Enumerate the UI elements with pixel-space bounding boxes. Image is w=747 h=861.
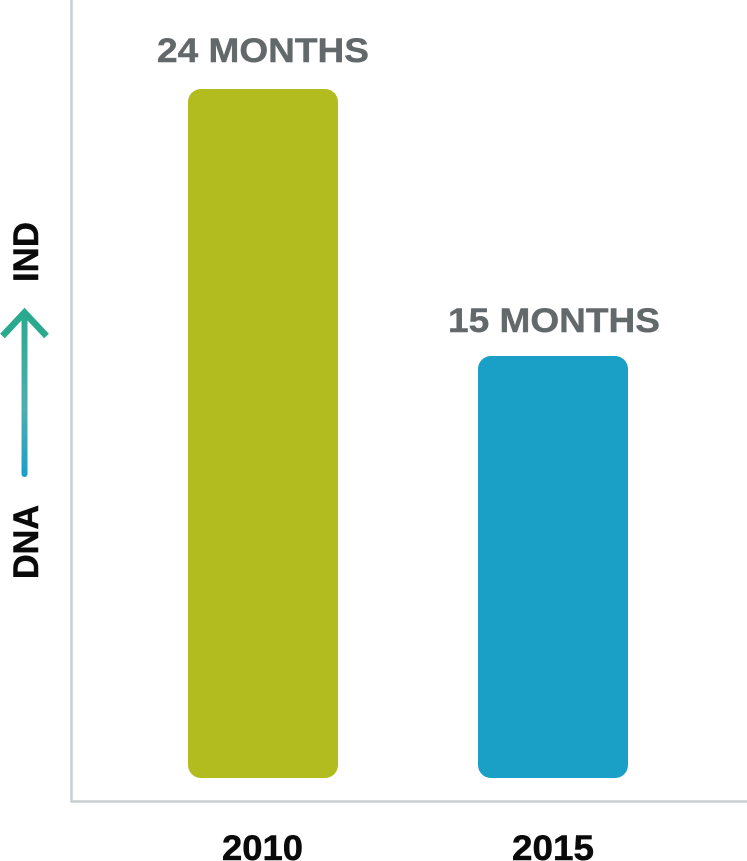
axis label: IND: IND <box>7 222 46 282</box>
value label: 24 months: 24 MONTHS <box>157 32 369 70</box>
arrow: DNA to IND <box>2 312 46 477</box>
axis label: DNA: DNA <box>7 505 46 579</box>
bar: 2010 <box>188 89 338 778</box>
value label: 15 months: 15 MONTHS <box>448 302 660 340</box>
bar: 2015 <box>478 356 628 778</box>
